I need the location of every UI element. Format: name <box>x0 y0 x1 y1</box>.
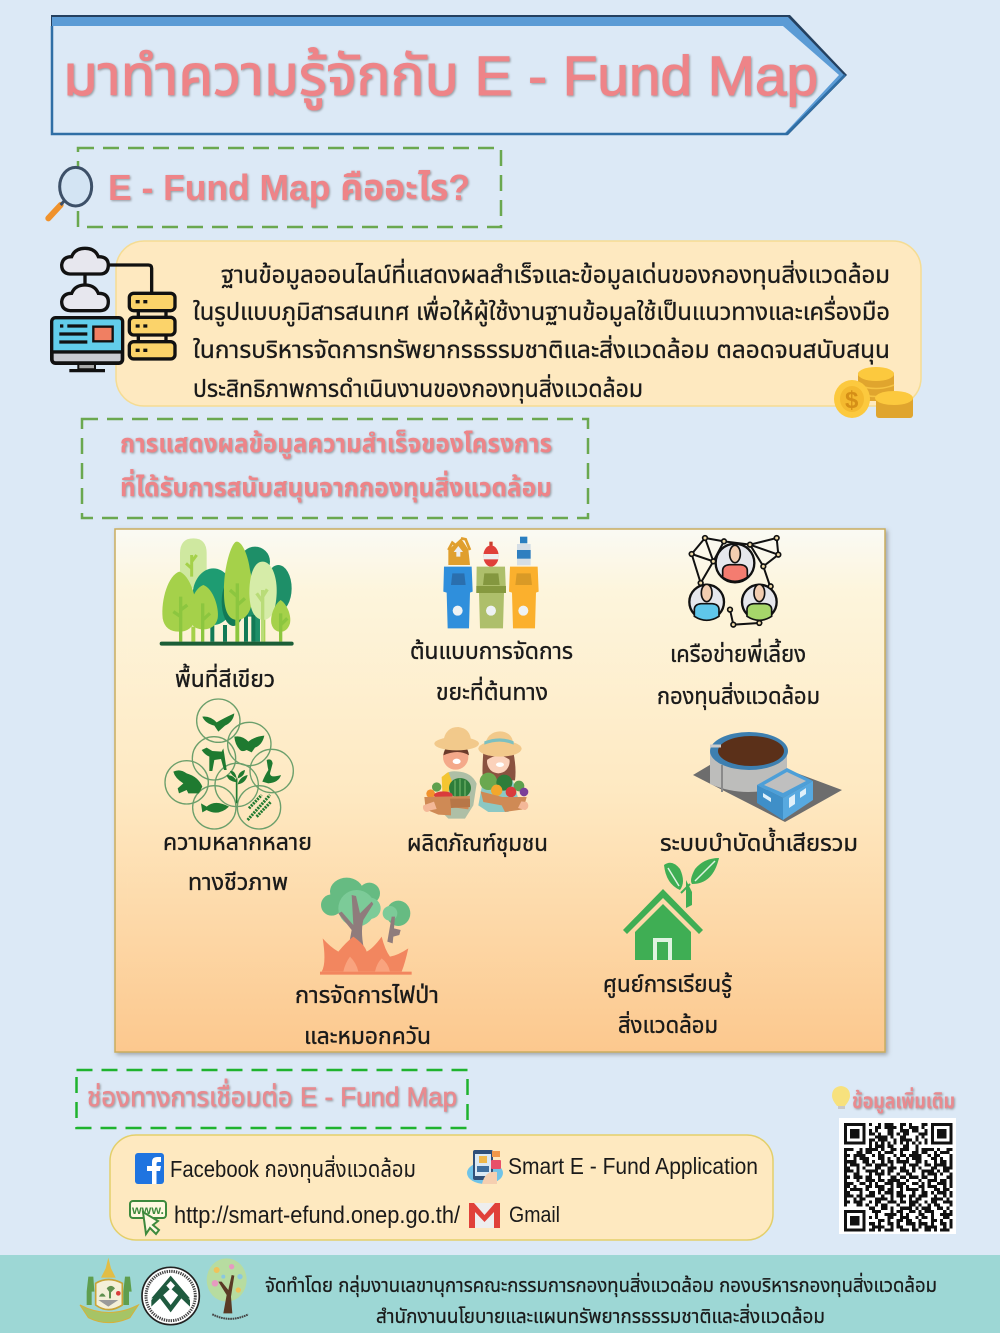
label: learning centre: ศูนย์การเรียนรู้ <box>603 971 732 999</box>
panel: results by category <box>115 529 885 1052</box>
label: learning centre: สิ่งแวดล้อม <box>618 1010 718 1038</box>
icon: cloud database computer <box>52 248 175 371</box>
heading text: ช่องทางการเชื่อมต่อ E - Fund Map <box>87 1078 457 1112</box>
icon: mentor network <box>689 536 781 627</box>
icon: forest fire <box>320 878 412 975</box>
facebook text: Facebook กองทุนสิ่งแวดล้อม <box>170 1154 416 1183</box>
heading text <box>120 428 552 503</box>
label: waste model <box>410 638 573 705</box>
icon: gold coins: $ <box>845 387 859 414</box>
icon: green forest <box>162 538 292 644</box>
logo: ministry emblem <box>80 1258 138 1323</box>
definition text: ประสิทธิภาพการดำเนินงานของกองทุนสิ่งแวดล้อม <box>193 373 643 404</box>
definition text: ในการบริหารจัดการทรัพยากรธรรมชาติและสิ่งแวดล้อม ตลอดจนสนับสนุน <box>193 334 890 365</box>
definition text: ฐานข้อมูลออนไลน์ที่แสดงผลสำเร็จและข้อมูลเด่นของกองทุนสิ่งแวดล้อม <box>221 258 890 290</box>
gmail text: Gmail <box>509 1202 560 1227</box>
label: wastewater system: ระบบบำบัดน้ำเสียรวม <box>660 827 858 856</box>
label: biodiversity: ความหลากหลาย <box>163 829 312 855</box>
label: biodiversity: ทางชีวภาพ <box>188 869 288 895</box>
label: forest fire management <box>295 982 439 1049</box>
panel: contact channels <box>110 1135 773 1240</box>
label: community products: ผลิตภัณฑ์ชุมชน <box>407 830 548 857</box>
definition text: ในรูปแบบภูมิสารสนเทศ เพื่อให้ผู้ใช้งานฐานข้อมูลใช้เป็นแนวทางและเครื่องมือ <box>193 295 890 327</box>
footer band <box>0 1255 1000 1333</box>
label: waste model: ขยะที่ต้นทาง <box>436 676 548 705</box>
logo: environment fund seal <box>142 1267 199 1325</box>
logo: tree of fund <box>207 1258 248 1319</box>
icon: recycling bins <box>443 537 539 628</box>
section heading: contact channels <box>76 1070 468 1128</box>
icon: community product farmers <box>423 727 528 819</box>
panel: definition <box>116 241 921 406</box>
icon: gmail <box>469 1203 500 1228</box>
heading text: E - Fund Map คืออะไร? <box>108 167 470 208</box>
definition text <box>193 258 890 404</box>
icon: learning centre house <box>623 858 719 960</box>
icon: wastewater treatment plant <box>693 732 842 822</box>
icon: www pointer <box>130 1201 166 1234</box>
section heading: project results <box>82 419 588 518</box>
label: mentor network: กองทุนสิ่งแวดล้อม <box>657 681 820 710</box>
icon: www pointer: www. <box>131 1203 164 1217</box>
label: forest fire management: และหมอกควัน <box>304 1023 431 1049</box>
label: learning centre <box>603 971 732 1038</box>
label: mentor network: เครือข่ายพี่เลี้ยง <box>670 638 806 667</box>
smart app text: Smart E - Fund Application <box>508 1153 758 1179</box>
label: mentor network <box>657 638 820 710</box>
more info heading: ข้อมูลเพิ่มเติม <box>852 1087 955 1114</box>
label: forest fire management: การจัดการไฟป่า <box>295 982 439 1008</box>
heading text: การแสดงผลข้อมูลความสำเร็จของโครงการ <box>120 428 552 459</box>
icon: facebook <box>135 1153 164 1184</box>
label: biodiversity <box>163 829 312 895</box>
icon: gold coins <box>834 367 913 418</box>
icon: light bulb <box>832 1086 850 1109</box>
heading text: ที่ได้รับการสนับสนุนจากกองทุนสิ่งแวดล้อม <box>120 469 552 503</box>
label: waste model: ต้นแบบการจัดการ <box>410 638 573 664</box>
label: green area: พื้นที่สีเขียว <box>175 663 275 692</box>
website url: http://smart-efund.onep.go.th/ <box>174 1202 460 1229</box>
icon: magnifying glass <box>48 167 92 218</box>
title banner <box>51 15 847 135</box>
section heading: what is E-Fund Map <box>78 148 501 227</box>
QR code <box>839 1118 956 1234</box>
icon: biodiversity circles <box>165 699 293 829</box>
footer text: จัดทำโดย กลุ่มงานเลขานุการคณะกรรมการกองทุนสิ่งแวดล้อม กองบริหารกองทุนสิ่งแวดล้อม <box>265 1272 937 1297</box>
footer text: สำนักงานนโยบายและแผนทรัพยากรธรรมชาติและสิ่งแวดล้อม <box>376 1303 825 1328</box>
title text: มาทำความรู้จักกับ E - Fund Map <box>63 44 818 110</box>
icon: smart app <box>467 1150 503 1184</box>
footer text <box>265 1272 937 1328</box>
